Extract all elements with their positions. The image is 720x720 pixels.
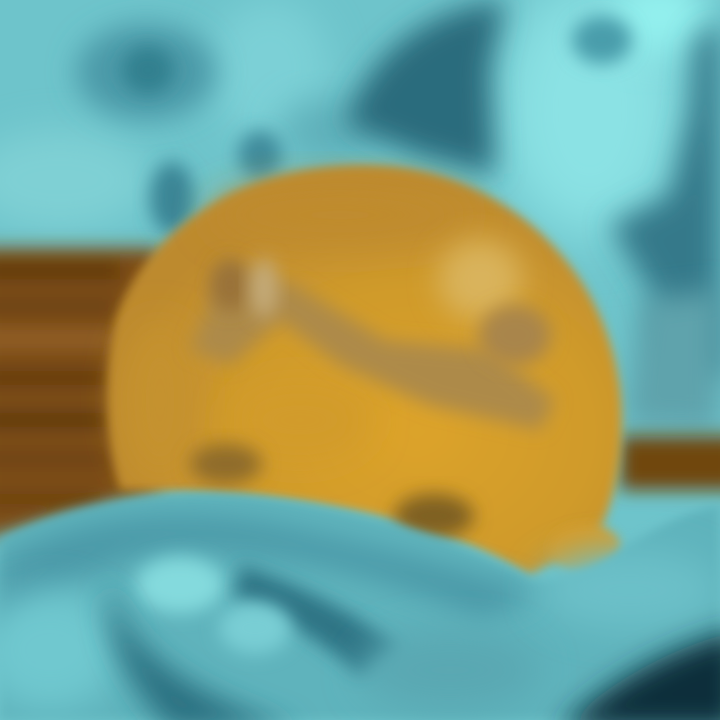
brown bar, right [620,436,720,490]
dark portrait details on banknote [76,0,720,430]
brown striped coin stack, left [0,248,160,540]
gold coin [108,165,622,575]
lower banknote folds [0,494,720,720]
coin relief: diagonal engraved band [190,265,555,430]
